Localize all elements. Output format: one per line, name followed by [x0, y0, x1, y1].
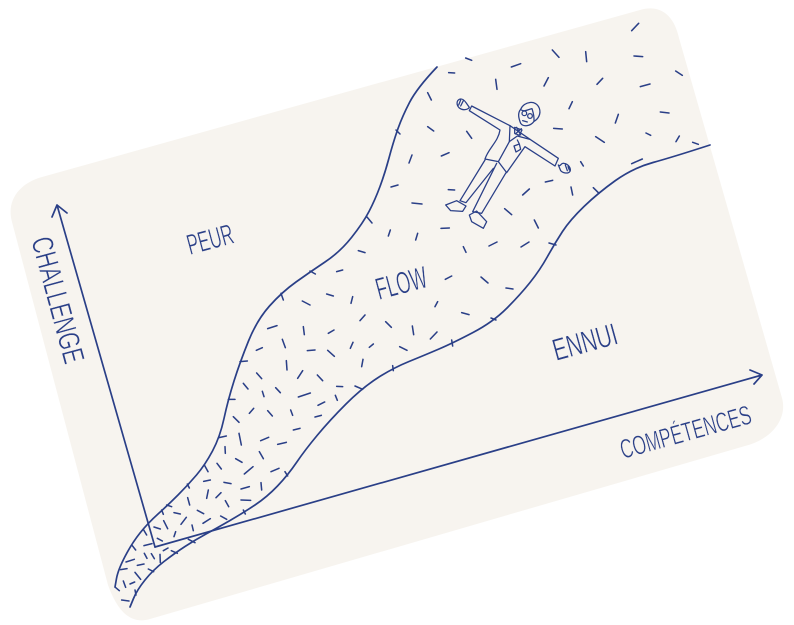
right hand [558, 163, 570, 173]
label: FLOW: FLOW [372, 259, 431, 307]
lower curve of flow channel [130, 145, 710, 607]
chart lines [52, 67, 762, 607]
label: ENNUI: ENNUI [549, 316, 621, 368]
flow particles: lower channel [115, 408, 300, 601]
flow particles: lower right and top left [367, 130, 556, 320]
left hand [457, 99, 469, 110]
left arm and jacket [469, 106, 510, 162]
tie and collar [515, 127, 522, 135]
head with hair and glasses [519, 102, 540, 126]
jacket right side and right arm [498, 126, 558, 173]
upper curve of flow channel [115, 67, 437, 587]
man floating in the flow [446, 99, 570, 228]
label: CHALLENGE: CHALLENGE [24, 233, 90, 367]
skills axis arrow [155, 370, 762, 547]
label: PEUR: PEUR [184, 219, 237, 262]
badge on jacket [514, 140, 521, 152]
flow particles: middle channel [228, 230, 469, 417]
flow particles: upper channel [428, 23, 698, 228]
left shoe [446, 201, 466, 211]
right shoe [469, 211, 487, 228]
left leg [460, 160, 493, 203]
right leg [473, 163, 506, 213]
challenge axis arrow [52, 205, 155, 547]
